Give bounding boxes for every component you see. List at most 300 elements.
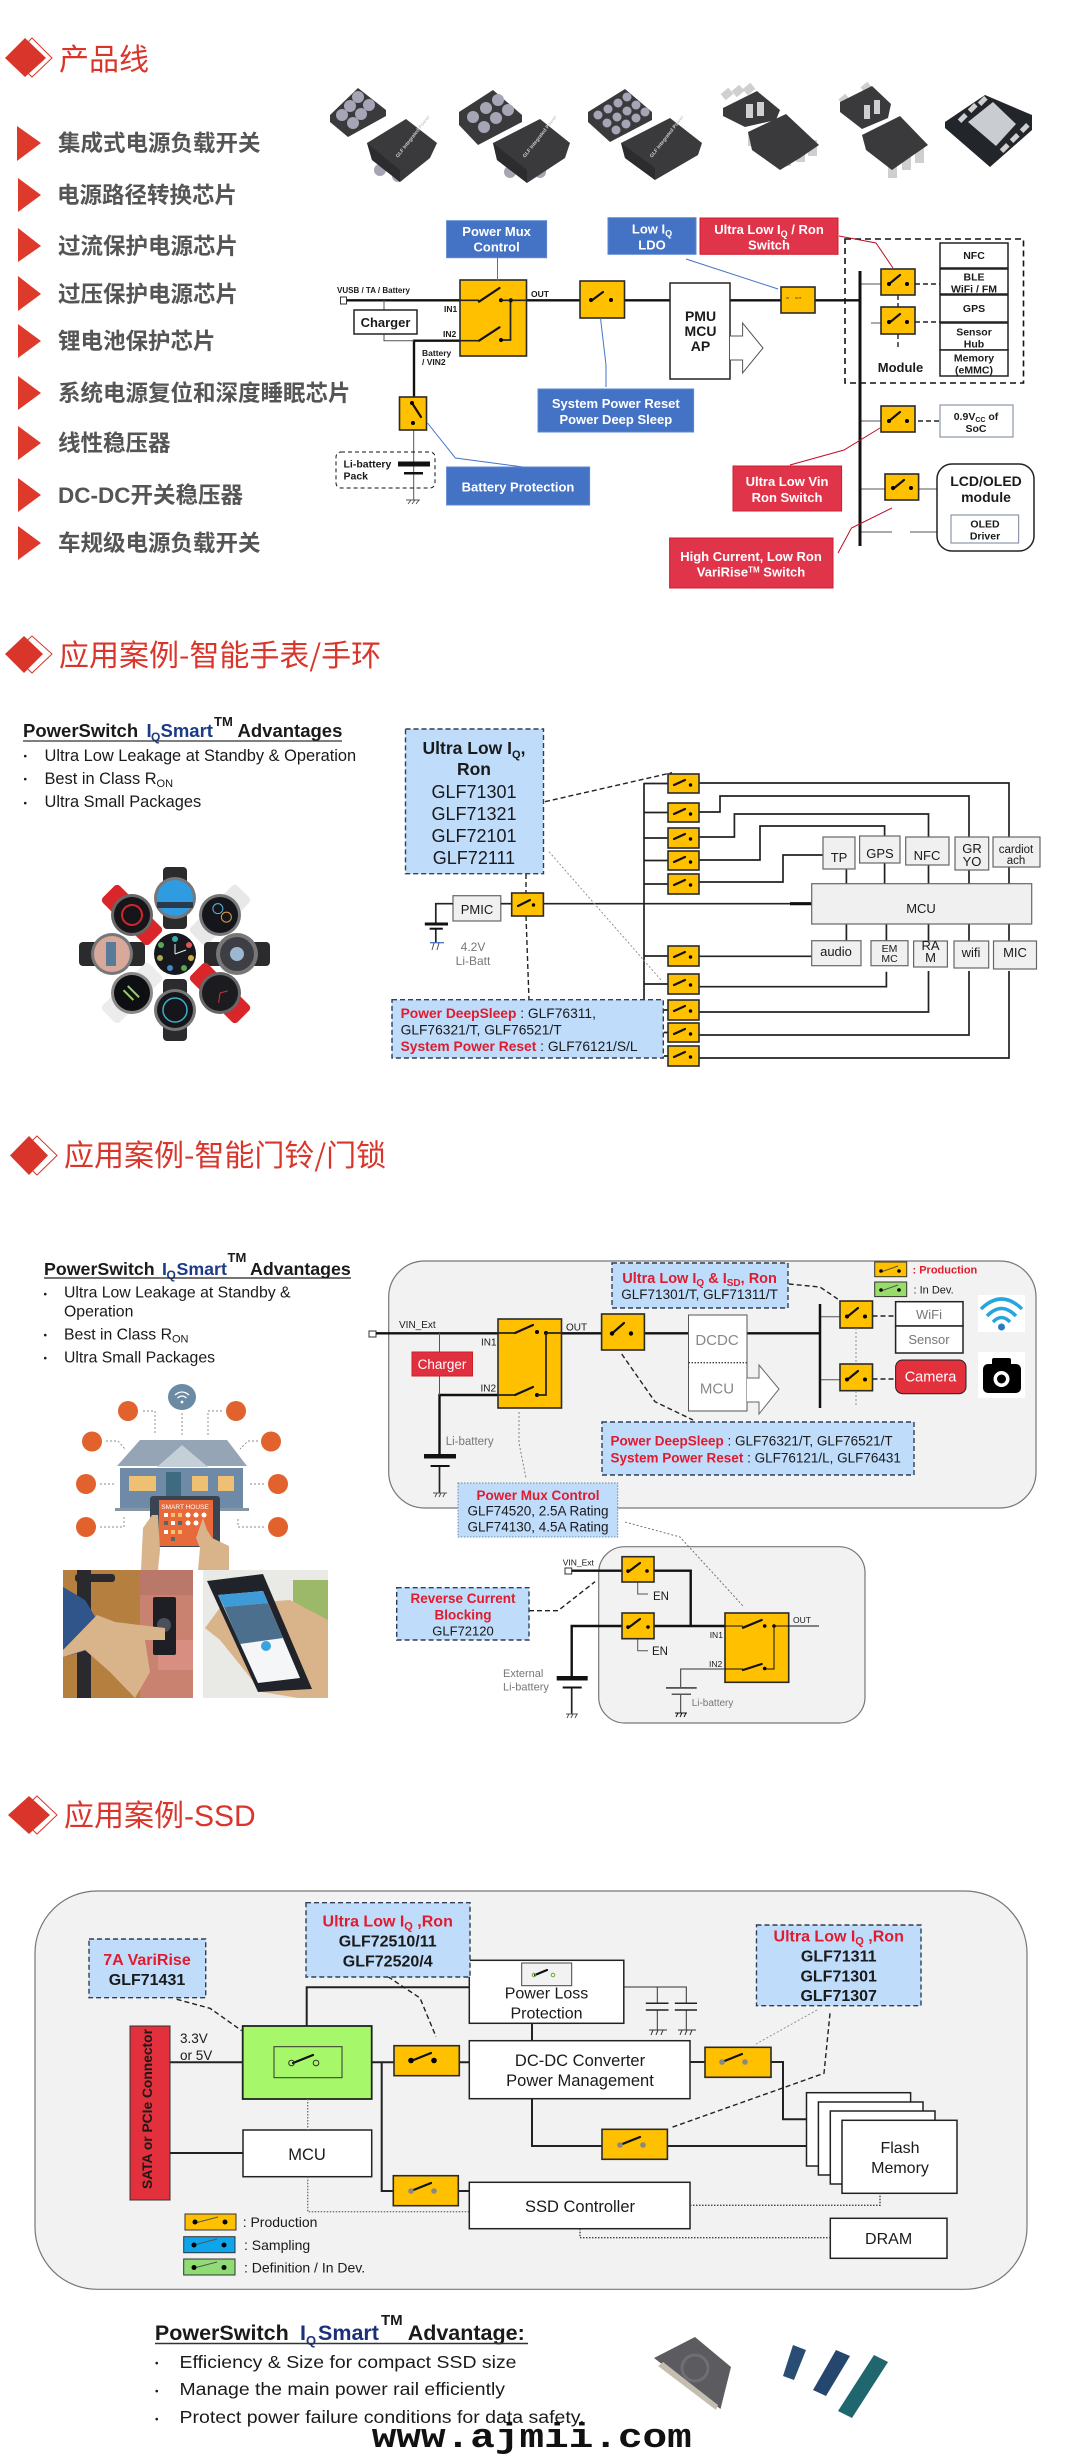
block: wifi sensor: Sensor — [908, 1332, 950, 1347]
bullet list: Best in Class R — [64, 1326, 172, 1344]
switch: power loss rail — [394, 2046, 459, 2076]
callout: deep sleep parts: Power DeepSleep : GLF76321/T, GLF76521/T — [610, 1434, 893, 1448]
tablet: SMART HOUSE — [161, 1504, 209, 1511]
block: SoC rail: SoC — [966, 423, 987, 435]
callout: ultra low isd: Q — [696, 1278, 704, 1289]
connector: SATA or PCIe — [130, 2026, 170, 2200]
switch: SSD controller rail — [393, 2176, 458, 2206]
block: charger: Charger — [418, 1357, 467, 1372]
switch: deep sleep — [602, 1314, 644, 1350]
labels: mux pins: IN1 — [481, 1338, 497, 1348]
module blocks: BLE — [964, 272, 984, 284]
callout: ultra low middle: Ultra Low I — [323, 1914, 404, 1930]
callout: ultra low right: ,Ron — [864, 1928, 904, 1946]
watermark: www.ajmii.com — [372, 2420, 692, 2458]
switch: battery — [622, 1613, 654, 1639]
labels: EN: EN — [652, 1646, 668, 1658]
tablet — [150, 1496, 220, 1547]
legend: production and in dev: : In Dev. — [914, 1284, 954, 1296]
callout: ultra low middle: ,Ron — [413, 1914, 453, 1930]
section: product line — [5, 35, 1034, 588]
module blocks: WiFi / FM — [951, 284, 997, 296]
labels: IN1 IN2 OUT: / VIN2 — [422, 357, 446, 367]
module blocks: Memory — [954, 352, 994, 364]
block: SoC rail — [940, 405, 1013, 437]
dotted link — [855, 1328, 857, 1405]
block: flash memory stack: Memory — [871, 2160, 929, 2177]
title: product line: 产品线 — [59, 35, 149, 79]
block: DCDC MCU: MCU — [700, 1380, 734, 1398]
wires: capacitors — [624, 1987, 696, 2035]
label: battery voltage: Li-Batt — [456, 954, 491, 968]
labels: pins: IN1 — [710, 1630, 723, 1640]
dashed leaders — [526, 773, 672, 1000]
heading: advantages — [23, 714, 342, 744]
callout: high current: TM — [748, 566, 760, 574]
block: power loss protection: Power Loss — [505, 1986, 588, 2002]
bullet list: Best in Class R — [44, 770, 157, 788]
block: LCD OLED module — [937, 464, 1034, 551]
bottom peripheral blocks: audio — [820, 944, 852, 959]
callout: ultra low switch: Switch — [748, 238, 790, 252]
heading: advantage: Smart — [318, 2321, 379, 2345]
external battery: External — [503, 1668, 543, 1680]
label: VIN_Ext: VIN_Ext — [563, 1558, 595, 1568]
icon: camera — [978, 1352, 1025, 1398]
block: LCD OLED module: module — [961, 489, 1011, 505]
icon: title diamond — [5, 636, 52, 673]
block: PMIC and switch — [453, 893, 543, 921]
callout: ultra low IQ parts: GLF71301 — [431, 782, 517, 802]
callout: ultra low isd — [612, 1263, 838, 1308]
heading: advantages: PowerSwitch — [23, 720, 138, 741]
bullet list: • — [44, 1290, 48, 1300]
top peripheral blocks: cardiot — [999, 844, 1034, 856]
title: SSD: 应用案例-SSD — [64, 1800, 256, 1833]
orange device icons — [76, 1401, 288, 1537]
callout: 7A VariRise: GLF71431 — [109, 1972, 185, 1989]
callout: ultra low isd: SD — [727, 1278, 741, 1289]
module blocks: GPS — [963, 303, 985, 315]
heading: advantages: I — [162, 1259, 167, 1279]
icon: input terminal — [340, 297, 346, 304]
callout: deep sleep parts: System Power Reset : GLF76121/L, GLF76431 — [610, 1450, 901, 1466]
switches: load switch column — [668, 774, 699, 1066]
chip pair 1: GLF Integrated Power — [395, 115, 432, 159]
terminal: VIN_Ext — [565, 1568, 572, 1574]
block: PMIC and switch: PMIC — [461, 902, 493, 917]
callout: power mux control: GLF74130, 4.5A Rating — [467, 1520, 609, 1534]
labels: IN1 IN2 OUT: OUT — [531, 289, 550, 299]
bullet list: Operation — [64, 1304, 133, 1320]
callout: ultra low IQ parts: GLF72101 — [431, 826, 517, 846]
switch: LDO: IN — [786, 296, 789, 300]
block: MCU: MCU — [288, 2146, 326, 2164]
callout: ultra low IQ parts: GLF71321 — [431, 804, 517, 824]
callout: ultra low isd: & I — [704, 1271, 727, 1287]
icon: title diamond — [10, 1136, 57, 1175]
wire: bus — [819, 1304, 821, 1408]
block: flash memory stack — [806, 2093, 957, 2193]
bullet list: • — [44, 1354, 48, 1364]
module blocks: Hub — [964, 338, 984, 350]
labels: IN1 IN2 OUT: IN1 — [444, 304, 458, 314]
block: PMU MCU AP: AP — [691, 338, 710, 354]
heading: advantages — [44, 1250, 351, 1282]
image: smart house — [76, 1384, 288, 1570]
dotted leader — [549, 852, 661, 980]
callout: ultra low middle: GLF72520/4 — [343, 1954, 433, 1970]
label: battery voltage: 4.2V — [461, 940, 485, 954]
hands — [141, 1515, 229, 1570]
heading: advantages: Q — [166, 1268, 176, 1282]
arrow: output — [747, 1365, 779, 1414]
callout: reverse current blocking: Reverse Current — [410, 1591, 516, 1606]
callout: battery protection: Battery Protection — [462, 480, 574, 494]
chip pair 2 — [459, 90, 570, 183]
block: camera: Camera — [905, 1370, 957, 1386]
top peripheral blocks: YO — [963, 854, 981, 869]
bottom peripheral blocks: wifi — [961, 945, 980, 960]
module dashed frame — [845, 239, 1024, 383]
legend: : Definition / In Dev. — [244, 2260, 365, 2276]
block: MCU: MCU — [906, 901, 936, 916]
internal battery: Li-battery — [692, 1698, 733, 1709]
bullet list — [155, 2352, 584, 2427]
wires: rail — [644, 783, 668, 1056]
battery pack: Pack — [344, 470, 368, 482]
callout: reverse current blocking: Blocking — [434, 1608, 492, 1622]
callout: ultra low right: GLF71307 — [800, 1988, 877, 2005]
heading: advantage: Q — [306, 2333, 316, 2348]
switch: LCD — [885, 474, 919, 500]
callout: high current — [670, 508, 892, 588]
label: voltage — [180, 2031, 212, 2063]
bullet list: • — [24, 798, 28, 810]
connector: SATA or PCIe: SATA or PCIe Connector — [140, 2028, 155, 2189]
wires: enable — [638, 1582, 648, 1651]
callout: low IQ LDO: Low I — [632, 222, 665, 236]
switch: camera — [840, 1364, 872, 1391]
block: SoC rail: of — [985, 411, 999, 423]
labels: pins: OUT — [793, 1615, 811, 1625]
labels: EN: EN — [653, 1591, 669, 1603]
bullet list — [44, 1284, 291, 1366]
top peripheral blocks: NFC — [914, 848, 940, 863]
product list: 过流保护电源芯片 — [58, 229, 238, 261]
wires: charger — [440, 1317, 840, 1395]
callout: ultra low isd: GLF71301/T, GLF71311/T — [621, 1287, 778, 1302]
switch: LDO — [781, 287, 815, 313]
bottom peripheral blocks: M — [925, 950, 936, 965]
heading: advantage: TM — [381, 2312, 403, 2329]
block: charger: Charger — [361, 315, 410, 330]
chip pair 4 — [721, 83, 819, 170]
callout: power mux control: GLF74520, 2.5A Rating — [467, 1504, 609, 1518]
switch: main VariRise — [243, 2026, 372, 2099]
block: wifi sensor: WiFi — [916, 1307, 942, 1322]
labels: IN1 IN2 OUT — [422, 289, 550, 367]
icon: title diamond — [8, 1796, 57, 1834]
callout: power mux control: Power Mux — [462, 224, 532, 239]
switch: wifi sensor — [840, 1301, 872, 1328]
switch: power mux — [460, 280, 526, 356]
bullet list: • — [44, 1330, 48, 1342]
external battery: Li-battery — [503, 1682, 549, 1694]
diagram: power tree — [336, 218, 1034, 588]
callout: ultra low IQ parts: Ron — [457, 759, 491, 779]
photo: door lock — [63, 1570, 193, 1698]
internal battery — [666, 1669, 733, 1717]
chip pair 1 — [330, 88, 437, 182]
callout: ultra low right — [670, 1925, 921, 2128]
top peripheral blocks: ach — [1007, 855, 1025, 867]
callout: ultra low vin: Ron Switch — [752, 490, 822, 505]
image: smart watches — [79, 867, 270, 1041]
block: DCDC MCU: DCDC — [695, 1332, 739, 1349]
battery: Li-battery: Li-battery — [446, 1436, 494, 1448]
switch: VIN — [622, 1557, 654, 1582]
bottom peripheral blocks: MC — [881, 953, 898, 965]
product list: 锂电池保护芯片 — [58, 324, 216, 356]
wires: heavy — [572, 1571, 725, 1677]
product list: DC-DC开关稳压器 — [58, 483, 243, 508]
callout: ultra low IQ parts — [406, 729, 544, 874]
bullet list: Protect power failure conditions for data safety. — [180, 2407, 584, 2427]
bullet list: • — [155, 2386, 159, 2398]
bullet list: • — [24, 774, 28, 786]
bullet list: Ultra Small Packages — [44, 793, 201, 811]
section: smart doorbell and lock — [10, 1131, 1036, 1723]
panel: upper doorbell circuit — [369, 1261, 1036, 1508]
callout: low IQ LDO: Q — [665, 228, 672, 238]
dashed links — [898, 284, 940, 421]
heading: advantages: TM — [214, 714, 233, 729]
photo: phone doorbell app — [203, 1570, 328, 1698]
heading: advantages: Advantages — [250, 1259, 351, 1279]
diagram: watch power tree — [392, 729, 1040, 1066]
wires: MCU stubs — [846, 863, 1009, 941]
callout: ultra low switch: Ultra Low I — [714, 222, 781, 237]
block: DC-DC converter — [469, 2041, 690, 2099]
wires: bottom row outputs — [699, 956, 1009, 1058]
dashed links — [872, 1316, 896, 1379]
block: LCD OLED module: Driver — [970, 530, 1000, 542]
switch: battery protection — [400, 397, 426, 430]
section: smart watch — [5, 631, 1040, 1066]
block: charger — [354, 310, 417, 334]
product list: 集成式电源负载开关 — [58, 126, 261, 158]
bullet list: Ultra Low Leakage at Standby & — [64, 1284, 291, 1302]
legend: : Production — [243, 2214, 317, 2230]
labels: mux pins — [480, 1322, 587, 1394]
chip 6: DFN package — [945, 95, 1032, 167]
switch: system power — [580, 281, 624, 318]
callout: power mux control — [447, 221, 547, 281]
callout: 7A VariRise: 7A VariRise — [103, 1952, 191, 1969]
wires: main rail — [346, 300, 860, 397]
callout: deep sleep parts: GLF76321/T, GLF76521/T — [401, 1022, 562, 1038]
chip images — [330, 82, 1032, 183]
callout: high current: Switch — [760, 564, 805, 580]
callout: reverse current blocking: GLF72120 — [432, 1624, 494, 1638]
heading: advantages: Advantages — [238, 720, 342, 741]
callout: low IQ LDO — [608, 218, 778, 289]
bullet list: • — [155, 2358, 159, 2370]
heading: advantages: Smart — [176, 1259, 227, 1279]
product list: 系统电源复位和深度睡眠芯片 — [58, 376, 351, 408]
block: PMU MCU AP — [670, 283, 730, 379]
bullet list — [24, 747, 356, 811]
labels: EN — [652, 1591, 669, 1658]
callout: deep sleep parts: Power DeepSleep : GLF76311, — [401, 1006, 596, 1021]
callout: low IQ LDO: LDO — [638, 238, 666, 252]
block: DRAM — [830, 2218, 947, 2258]
chip pair 5 — [838, 82, 928, 178]
callout: deep sleep parts — [602, 1354, 914, 1475]
block: DC-DC converter: DC-DC Converter — [515, 2052, 646, 2070]
callout: high current: VariRise — [697, 564, 748, 580]
bullet list: ON — [157, 778, 173, 790]
image: SATA SSD — [654, 2337, 731, 2410]
switch: module 2 — [881, 307, 915, 334]
heading: advantages: Smart — [160, 720, 213, 741]
callout: ultra low right: Ultra Low I — [774, 1928, 855, 1946]
labels: IN1 IN2 OUT: IN2 — [443, 329, 456, 339]
bullet list: Ultra Low Leakage at Standby & Operation — [44, 747, 356, 765]
section: SSD — [8, 1796, 1027, 2458]
callout: reverse current blocking — [397, 1582, 595, 1640]
product list — [17, 126, 351, 560]
callout: system power reset — [538, 318, 694, 432]
block: charger — [412, 1352, 472, 1376]
switch: power mux — [498, 1319, 562, 1408]
callout: 7A VariRise — [89, 1939, 242, 2031]
battery pack: Li-battery — [344, 458, 392, 470]
bullet list: Ultra Small Packages — [64, 1350, 215, 1366]
battery symbol — [425, 904, 453, 950]
label: module: Module — [878, 360, 923, 375]
wires: top row outputs — [699, 783, 1009, 882]
product list: 过压保护电源芯片 — [58, 277, 238, 309]
wires: main — [376, 1333, 820, 1455]
bottom peripheral blocks — [812, 938, 1036, 969]
block: flash memory stack: Flash — [880, 2140, 920, 2157]
callout: ultra low switch: / Ron — [788, 222, 824, 237]
callout: power mux control: Power Mux Control — [476, 1488, 600, 1503]
callout: ultra low middle — [306, 1903, 470, 2037]
product list: 车规级电源负载开关 — [58, 526, 261, 558]
callout: ultra low IQ parts: , — [521, 738, 525, 758]
heading: advantages: I — [146, 720, 152, 741]
switch: SoC — [881, 406, 915, 432]
callout: power mux control — [458, 1483, 743, 1606]
label: VUSB: VUSB / TA / Battery — [337, 286, 410, 295]
label: battery voltage — [456, 940, 491, 968]
labels: pins — [709, 1615, 811, 1669]
callout: ultra low right: GLF71311 — [801, 1948, 877, 1966]
label: VIN_Ext: VIN_Ext — [399, 1320, 436, 1331]
callout: ultra low switch: Q — [781, 229, 788, 239]
dotted signals — [308, 2099, 469, 2212]
labels: pins: IN2 — [709, 1659, 722, 1669]
bottom peripheral blocks: RA — [921, 938, 940, 953]
heading: advantages: Q — [151, 730, 160, 744]
labels: IN1 IN2 OUT: Battery — [422, 348, 452, 358]
callout: ultra low IQ parts: GLF72111 — [433, 848, 515, 868]
callout: power mux control: Control — [473, 240, 520, 255]
callout: ultra low vin — [733, 428, 880, 511]
battery pack — [336, 452, 435, 504]
switch: module 1 — [881, 269, 915, 295]
top peripheral blocks: TP — [831, 850, 847, 865]
label: voltage: or 5V — [180, 2048, 212, 2063]
heading: advantage: Advantage: — [408, 2321, 525, 2345]
callout: deep sleep parts: System Power Reset : GLF76121/S/L — [401, 1039, 638, 1054]
callout: ultra low isd: Ultra Low I — [622, 1271, 777, 1289]
module blocks: Sensor — [956, 326, 992, 338]
heading: advantages: PowerSwitch — [44, 1259, 155, 1279]
top peripheral blocks — [823, 836, 1040, 870]
labels: mux pins: OUT — [566, 1322, 587, 1334]
module blocks — [940, 243, 1008, 376]
switch: power mux — [725, 1613, 819, 1682]
block: SSD controller: SSD Controller — [525, 2198, 636, 2216]
bullet list: • — [24, 752, 28, 762]
wires: heavy — [170, 1987, 806, 2191]
block: DCDC MCU — [688, 1315, 747, 1411]
lower panel: reverse blocking circuit — [503, 1547, 865, 1723]
callout: ultra low switch — [700, 218, 893, 268]
switch: flash lower — [602, 2129, 667, 2159]
block: camera — [896, 1360, 966, 1394]
battery: Li-battery — [424, 1436, 494, 1497]
icon: title diamond — [5, 38, 52, 77]
callout: deep sleep parts — [392, 1000, 663, 1058]
block: SSD controller — [469, 2182, 690, 2229]
callout: ultra low middle: GLF72510/11 — [339, 1934, 437, 1950]
callout: battery protection — [428, 423, 590, 505]
bullet list: Manage the main power rail efficiently — [180, 2379, 505, 2399]
external battery — [503, 1668, 588, 1718]
dotted signals — [580, 2193, 880, 2238]
legend: production and in dev — [875, 1262, 978, 1297]
block: wifi sensor — [896, 1302, 963, 1353]
bullet list: • — [155, 2414, 159, 2426]
bullet list: Efficiency & Size for compact SSD size — [180, 2352, 516, 2372]
wire: bus — [858, 271, 862, 546]
bottom peripheral blocks: MIC — [1003, 945, 1027, 960]
block: MCU — [243, 2130, 372, 2177]
legend: production and in dev: : Production — [912, 1264, 978, 1276]
connector dashes — [100, 1411, 264, 1527]
heading: advantage: I — [300, 2321, 306, 2345]
wire: thick MCU entry — [790, 902, 812, 905]
callout: system power reset: System Power Reset — [552, 396, 680, 411]
chip pair 2: GLF Integrated Power — [522, 115, 559, 159]
capacitor plates — [646, 2003, 697, 2010]
switch: LDO: OUT — [795, 296, 802, 300]
arrow: outputs — [730, 323, 763, 373]
switch: flash upper — [705, 2047, 771, 2077]
dotted link to mux — [519, 1412, 526, 1478]
top peripheral blocks: GR — [962, 841, 982, 856]
module blocks: (eMMC) — [955, 364, 993, 376]
callout: ultra low IQ parts: Q — [512, 749, 521, 761]
block: DC-DC converter: Power Management — [506, 2072, 654, 2090]
title: doorbell: 应用案例-智能门铃/门锁 — [64, 1131, 386, 1175]
product list: 线性稳压器 — [58, 426, 171, 458]
